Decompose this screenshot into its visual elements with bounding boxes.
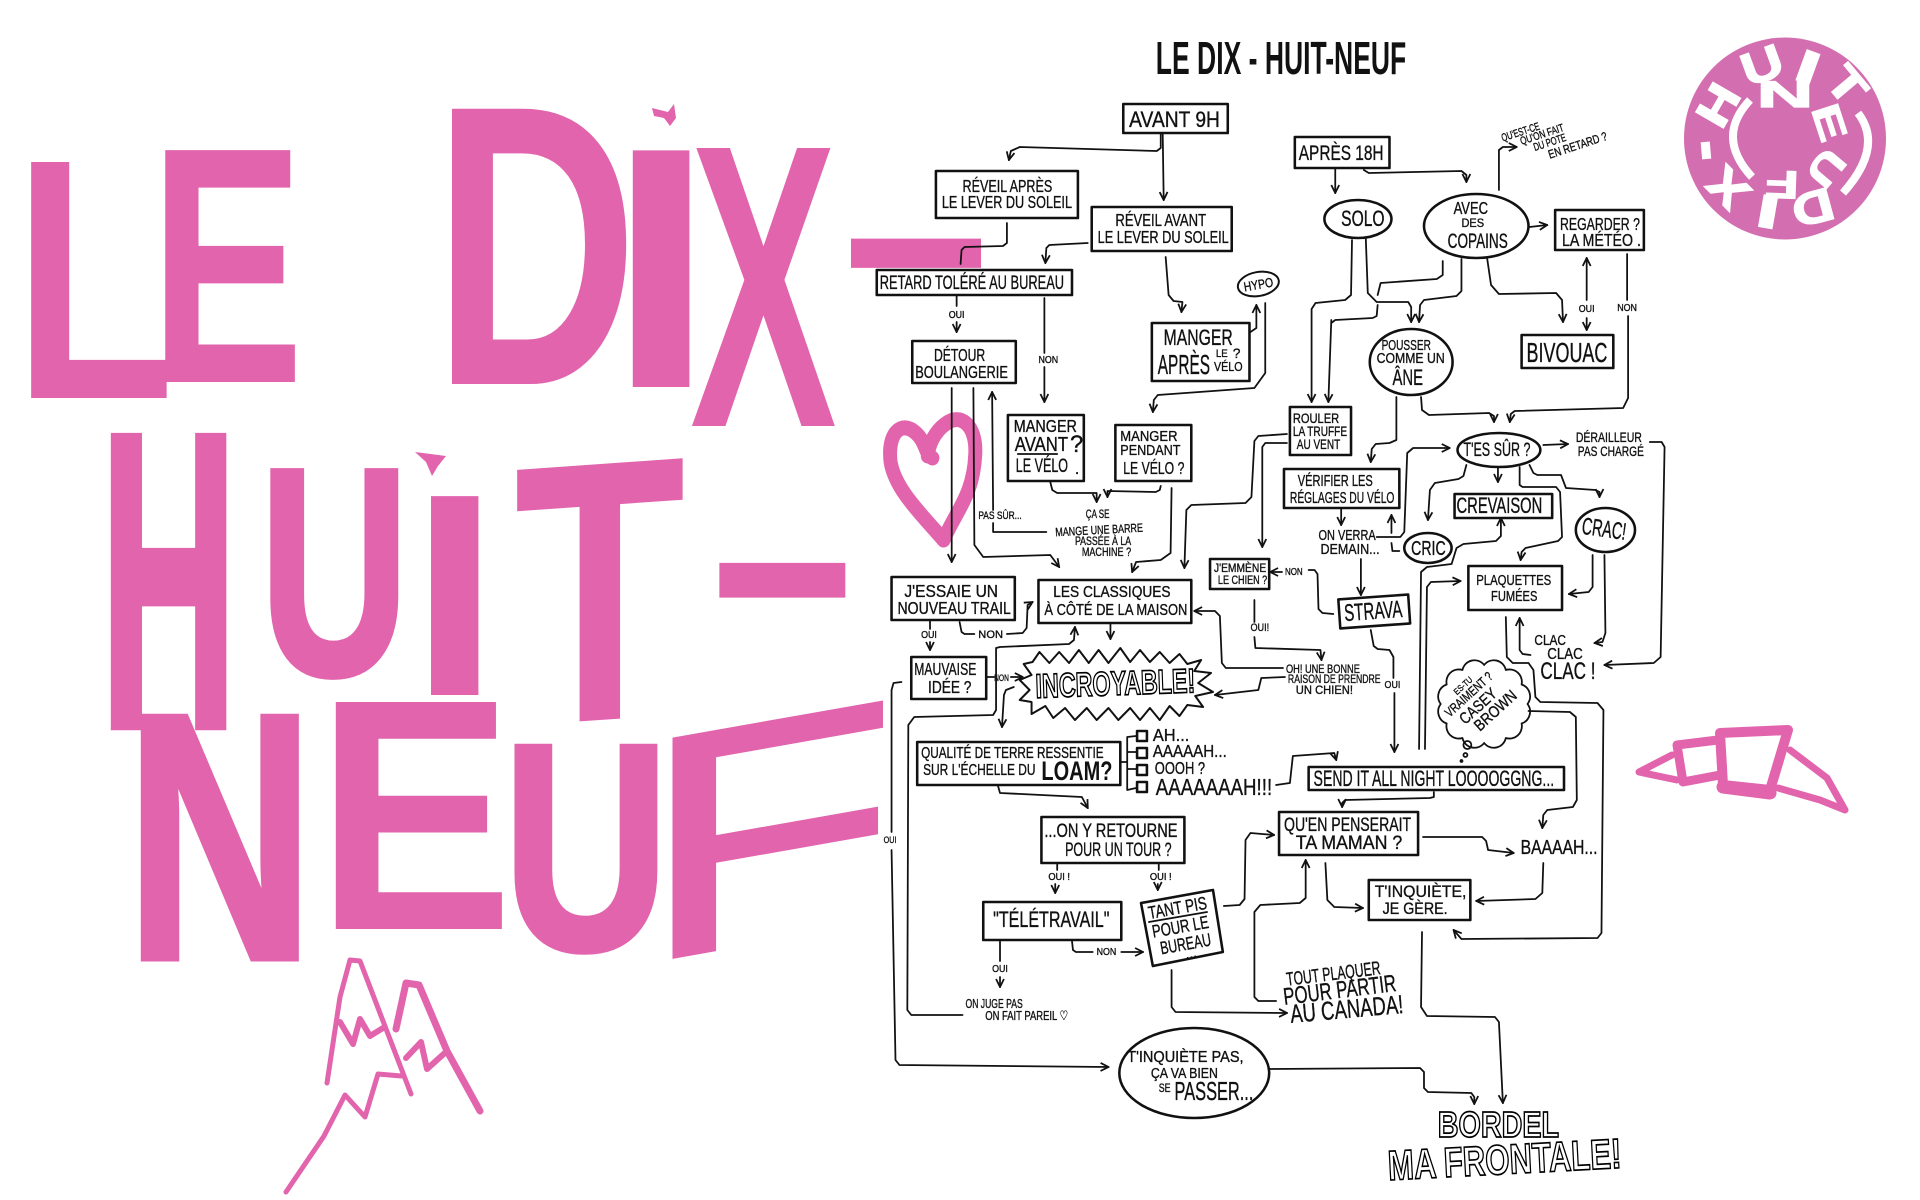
- note: on juge pas on fait pareil: [966, 996, 1068, 1023]
- arrows from pousser: [1371, 397, 1494, 462]
- arrow from bubble to frontale: [1268, 1068, 1474, 1104]
- bubble: cric: [1404, 533, 1452, 563]
- box: manger après le vélo: APRÈS: [1158, 349, 1210, 380]
- note: on juge pas on fait pareil: ON FAIT PAREIL ♡: [985, 1008, 1068, 1023]
- arrows from avant 9h: [1009, 133, 1164, 200]
- box: on y retourne pour un tour: ...ON Y RETOURNE: [1044, 820, 1177, 841]
- arrow from baaaah: [1476, 863, 1543, 901]
- box: manger avant le vélo: ?: [1070, 431, 1083, 458]
- arrows from strava: OUI: [1385, 680, 1400, 691]
- arrows from regarder la météo: NON: [1617, 303, 1637, 314]
- box: après 18h: [1295, 137, 1389, 168]
- thought cloud: es-tu vraiment casey brown: VRAIMENT ?: [1442, 669, 1496, 720]
- bubble: pousser comme un âne: ÂNE: [1392, 365, 1423, 390]
- box: crevaison: CREVAISON: [1457, 493, 1542, 518]
- box: détour boulangerie: DÉTOUR: [934, 345, 985, 365]
- big pink brush title: I: [606, 77, 716, 461]
- note: qu'est-ce qu'on fait du pote en retard: QU'ON FAIT: [1519, 122, 1566, 148]
- big pink brush title: -: [831, 95, 1002, 370]
- bubble: solo: [1324, 200, 1391, 238]
- box: mauvaise idée: [911, 657, 986, 699]
- box: qu'en penserait ta maman: [1279, 812, 1418, 855]
- big pink brush title: T: [514, 377, 686, 805]
- arrows from qu'en penserait: [1325, 837, 1514, 908]
- arrows from réveil avant: [1045, 243, 1182, 312]
- arrows from j'essaie: NON: [978, 629, 1003, 641]
- box: les classiques à côté de la maison: [1038, 580, 1191, 623]
- note: oh une bonne raison de prendre un chien: OH! UNE BONNE: [1286, 662, 1360, 676]
- arrow from t'inquiète to frontale: [1421, 932, 1503, 1103]
- final text: bordel ma frontale: [1387, 1105, 1622, 1189]
- final text: bordel ma frontale: BORDEL: [1438, 1105, 1559, 1145]
- logo badge: I: [1788, 39, 1827, 96]
- box: réveil après le lever du soleil: [936, 171, 1078, 218]
- label: baaaah: BAAAAH...: [1521, 837, 1598, 859]
- box: regarder la météo: LA MÉTÉO .: [1562, 230, 1641, 250]
- logo badge: H: [1686, 75, 1751, 136]
- arrow: classiques to incroyable: [1109, 624, 1111, 639]
- arrows from tant pis: [1172, 833, 1287, 1013]
- bubble: pousser comme un âne: [1370, 329, 1453, 395]
- box: qualité de terre loam: SUR L'ÉCHELLE DU: [923, 760, 1036, 779]
- box: rouler la truffe au vent: [1290, 407, 1351, 455]
- box: réveil avant le lever du soleil: RÉVEIL AVANT: [1115, 210, 1206, 230]
- big pink brush title: N: [126, 642, 314, 1033]
- box: tant pis pour le bureau: BUREAU: [1159, 930, 1213, 958]
- icon: pink heart: [890, 420, 975, 540]
- box: réveil après le lever du soleil: RÉVEIL APRÈS: [963, 176, 1052, 196]
- flowchart heading: LE DIX - HUIT-NEUF: [1156, 33, 1406, 84]
- box: qu'en penserait ta maman: TA MAMAN ?: [1296, 832, 1402, 853]
- big pink brush title: U: [260, 407, 409, 737]
- arrows from j'essaie: [921, 602, 1033, 650]
- bubble: hypo: [1236, 269, 1281, 299]
- bubble: t'inquiète pas ça va bien se passer: [1119, 1028, 1269, 1118]
- box: manger avant le vélo: [1008, 415, 1084, 481]
- big pink brush title: [14, 22, 1002, 1033]
- logo badge: N: [1757, 74, 1813, 115]
- arrows from on y retourne: OUI !: [1048, 872, 1070, 883]
- box: send it all night: [1309, 766, 1564, 791]
- checkbox options: AAAAAH...: [1153, 741, 1227, 761]
- box: manger après le vélo: LE: [1216, 348, 1228, 360]
- box: manger avant le vélo: AVANT: [1015, 434, 1068, 456]
- arrows from télétravail: OUI: [992, 964, 1008, 975]
- arrows: to loam and back to classiques: [907, 627, 1075, 1015]
- arrows and label from j'emmène le chien: [1250, 600, 1321, 660]
- bubble: t'inquiète pas ça va bien se passer: PASSER...: [1175, 1078, 1253, 1106]
- box: plaquettes fumées: [1468, 566, 1562, 610]
- box: tant pis pour le bureau: TANT PIS: [1147, 893, 1208, 923]
- box: vérifier les réglages du vélo: [1284, 469, 1399, 508]
- box: qualité de terre loam: [917, 742, 1120, 786]
- big pink brush title: I: [409, 434, 500, 757]
- box: t'inquiète je gère: T'INQUIÈTE,: [1375, 882, 1466, 901]
- arrows from retard with oui non labels: [949, 295, 1058, 402]
- arrows from retard with oui non labels: NON: [1038, 355, 1058, 366]
- text: tout plaquer pour partir au canada: [1282, 957, 1404, 1029]
- arrows from télétravail: [992, 941, 1143, 987]
- box: manger après le vélo: MANGER: [1164, 325, 1233, 350]
- bubble: avec des copains: AVEC: [1454, 198, 1488, 218]
- box: manger pendant le vélo: LE VÉLO ?: [1123, 458, 1184, 478]
- bubble: t'inquiète pas ça va bien se passer: T'INQUIÈTE PAS,: [1127, 1047, 1244, 1066]
- burst: incroyable: INCROYABLE!: [1035, 662, 1196, 706]
- box: réveil avant le lever du soleil: [1092, 207, 1232, 251]
- label: pas sûr: PAS SÛR...: [978, 509, 1022, 522]
- arrows from t'es sûr: [1428, 444, 1600, 560]
- thought cloud: es-tu vraiment casey brown: [1438, 660, 1530, 762]
- bubble: t'inquiète pas ça va bien se passer: SE: [1159, 1081, 1171, 1095]
- arrow from send it: [1342, 792, 1434, 807]
- box: détour boulangerie: [912, 341, 1016, 383]
- arrows around plaquettes: [1419, 518, 1603, 939]
- arrows from mauvaise idée: OUI: [884, 835, 896, 845]
- text: tout plaquer pour partir au canada: AU CANADA!: [1289, 991, 1404, 1029]
- text: clac clac clac: CLAC: [1534, 633, 1566, 649]
- box: plaquettes fumées: PLAQUETTES: [1476, 573, 1551, 589]
- bubble: solo: SOLO: [1341, 206, 1385, 231]
- box: manger après le vélo: VÉLO: [1214, 359, 1243, 374]
- bubble: avec des copains: DES: [1461, 216, 1484, 230]
- box: manger pendant le vélo: MANGER: [1120, 429, 1178, 445]
- box: télétravail: [983, 902, 1121, 940]
- thought cloud: es-tu vraiment casey brown: CASEY: [1456, 685, 1501, 728]
- note: on juge pas on fait pareil: ON JUGE PAS: [966, 996, 1023, 1011]
- note: oh une bonne raison de prendre un chien: RAISON DE PRENDRE: [1288, 672, 1381, 686]
- burst: incroyable: [1020, 648, 1213, 720]
- box: manger pendant le vélo: [1115, 425, 1191, 481]
- arrows and label from j'emmène le chien: OUI!: [1250, 622, 1269, 634]
- label: dérailleur pas chargé: PAS CHARGÉ: [1578, 443, 1644, 459]
- box: bivouac: [1522, 335, 1613, 368]
- note: qu'est-ce qu'on fait du pote en retard: [1500, 101, 1609, 174]
- arrows from mauvaise idée: NON: [994, 673, 1009, 683]
- bubble: pousser comme un âne: POUSSER: [1382, 338, 1431, 354]
- label: on verra demain: ON VERRA: [1318, 528, 1376, 544]
- box: qualité de terre loam: LOAM?: [1041, 756, 1112, 786]
- big pink brush title: L: [14, 88, 175, 471]
- text: tout plaquer pour partir au canada: POUR PARTIR: [1282, 970, 1398, 1011]
- logo badge: T: [1815, 56, 1877, 116]
- arrows from strava: NON: [1285, 567, 1303, 578]
- bubble: t'es sûr: [1458, 433, 1540, 467]
- box: j'emmène le chien: [1210, 559, 1269, 589]
- thought cloud: es-tu vraiment casey brown: ES-TU: [1452, 675, 1474, 697]
- box: rouler la truffe au vent: LA TRUFFE: [1293, 423, 1347, 439]
- box: j'essaie un nouveau trail: J'ESSAIE UN: [904, 581, 998, 601]
- bubble: crac: CRAC!: [1580, 513, 1628, 546]
- checkbox options: OOOH ?: [1155, 758, 1205, 778]
- box: avant 9h: AVANT 9H: [1129, 107, 1220, 132]
- arrows from rouler la truffe: [1184, 434, 1287, 568]
- arrows from après 18h: [1335, 168, 1466, 193]
- box: vérifier les réglages du vélo: RÉGLAGES DU VÉLO: [1290, 488, 1394, 507]
- box: après 18h: APRÈS 18H: [1299, 142, 1384, 165]
- box: rouler la truffe au vent: AU VENT: [1297, 436, 1341, 452]
- label: on verra demain: DEMAIN...: [1320, 542, 1380, 558]
- box: j'essaie un nouveau trail: [892, 577, 1015, 620]
- logo badge: U: [1798, 140, 1855, 196]
- box: tant pis pour le bureau: [1141, 890, 1223, 966]
- text: clac clac clac: CLAC !: [1540, 658, 1596, 685]
- bubble: pousser comme un âne: COMME UN: [1377, 351, 1445, 367]
- box: manger pendant le vélo: PENDANT: [1120, 443, 1180, 459]
- arrow from dérailleur: [1604, 442, 1665, 665]
- box: tant pis pour le bureau: POUR LE: [1151, 912, 1210, 942]
- arrow from cloud to baaaah: [1529, 711, 1577, 828]
- box: réveil avant le lever du soleil: LE LEVER DU SOLEIL: [1098, 227, 1229, 247]
- note: ça se mange une barre passée à la machine: [1055, 507, 1143, 559]
- box: strava: [1338, 595, 1410, 628]
- arrows from loam: [998, 753, 1336, 808]
- big pink brush title: F: [640, 631, 898, 1030]
- logo badge: F: [1764, 162, 1800, 206]
- box: vérifier les réglages du vélo: VÉRIFIER LES: [1298, 471, 1373, 490]
- note: qu'est-ce qu'on fait du pote en retard: QU'EST-CE: [1500, 121, 1541, 145]
- note: ça se mange une barre passée à la machine: MANGE UNE BARRE: [1055, 521, 1143, 539]
- logo badge: D: [1786, 177, 1839, 237]
- big pink brush title: E: [316, 631, 513, 1000]
- arrows around manger après: [1153, 303, 1265, 412]
- arrows from mauvaise idée: [884, 673, 1108, 1067]
- big pink brush title: D: [433, 22, 638, 469]
- big pink brush title: E: [150, 78, 304, 454]
- box: qu'en penserait ta maman: QU'EN PENSERAIT: [1284, 814, 1412, 835]
- box: bivouac: BIVOUAC: [1527, 337, 1607, 368]
- logo badge: X: [1697, 155, 1760, 219]
- bubble: hypo: HYPO: [1243, 274, 1274, 295]
- arrows from on y retourne: [1048, 864, 1172, 893]
- box: j'essaie un nouveau trail: NOUVEAU TRAIL: [897, 598, 1011, 618]
- panel: flowchart: [877, 33, 1665, 1189]
- box: télétravail: "TÉLÉTRAVAIL": [993, 907, 1109, 932]
- arrows from télétravail: NON: [1097, 947, 1116, 958]
- logo badge: I: [1752, 184, 1784, 239]
- box: t'inquiète je gère: [1369, 880, 1470, 920]
- arrows from manger avant and pendant: [1050, 482, 1172, 572]
- text: clac clac clac: CLAC: [1547, 646, 1583, 663]
- bubble: avec des copains: COPAINS: [1448, 230, 1508, 253]
- box: on y retourne pour un tour: POUR UN TOUR ?: [1065, 839, 1172, 860]
- note: oh une bonne raison de prendre un chien: UN CHIEN!: [1296, 683, 1353, 697]
- bubble: cric: CRIC: [1411, 538, 1446, 560]
- checkbox options: [1120, 725, 1272, 800]
- arrows around on verra demain: [1341, 448, 1450, 595]
- logo badge: -: [1667, 138, 1735, 164]
- box: manger après le vélo: [1152, 323, 1249, 381]
- box: j'emmène le chien: LE CHIEN ?: [1218, 573, 1267, 587]
- label: dérailleur pas chargé: [1576, 429, 1644, 459]
- box: manger avant le vélo: .: [1075, 461, 1079, 478]
- box: mauvaise idée: IDÉE ?: [928, 677, 971, 697]
- arrow: réveil après to retard: [961, 223, 1007, 264]
- label: dérailleur pas chargé: DÉRAILLEUR: [1576, 429, 1642, 445]
- box: manger après le vélo: ?: [1233, 345, 1241, 361]
- arrows from regarder la météo: [1510, 254, 1637, 422]
- arrows from solo: [1312, 239, 1411, 402]
- box: réveil après le lever du soleil: LE LEVER DU SOLEIL: [942, 192, 1072, 212]
- label: on verra demain: [1318, 528, 1380, 558]
- arrows from avec des copains: [1328, 147, 1563, 402]
- icon: pink croissant: [1639, 730, 1845, 810]
- note: ça se mange une barre passée à la machine: ÇA SE: [1086, 507, 1109, 521]
- logo badge: [1667, 35, 1886, 240]
- box: les classiques à côté de la maison: À CÔTÉ DE LA MAISON: [1044, 600, 1187, 619]
- arrow from tout plaquer: [1254, 860, 1306, 1001]
- box: t'inquiète je gère: JE GÈRE.: [1383, 899, 1448, 918]
- note: qu'est-ce qu'on fait du pote en retard: DU POTE: [1532, 132, 1568, 154]
- box: retard toléré au bureau: [877, 270, 1072, 295]
- box: détour boulangerie: BOULANGERIE: [915, 362, 1008, 382]
- box: rouler la truffe au vent: ROULER: [1293, 410, 1339, 426]
- box: tant pis pour le bureau: ...: [1184, 944, 1198, 962]
- bubble: avec des copains: [1424, 194, 1529, 258]
- text: clac clac clac: [1534, 633, 1596, 685]
- box: send it all night: SEND IT ALL NIGHT LOOOOGGNG...: [1314, 766, 1554, 791]
- box: strava: STRAVA: [1343, 596, 1403, 627]
- thought cloud: es-tu vraiment casey brown: BROWN: [1471, 687, 1521, 735]
- arrows from crac: [1569, 555, 1605, 643]
- final text: bordel ma frontale: MA FRONTALE!: [1387, 1130, 1622, 1189]
- arrows from regarder la météo: OUI: [1579, 304, 1595, 315]
- box: retard toléré au bureau: RETARD TOLÉRÉ AU BUREAU: [880, 272, 1064, 293]
- note: qu'est-ce qu'on fait du pote en retard: EN RETARD ?: [1546, 129, 1609, 162]
- big pink brush title: H: [100, 347, 237, 816]
- checkbox options: AAAAAAAH!!!: [1156, 774, 1272, 800]
- arrows from on y retourne: OUI !: [1150, 872, 1172, 883]
- icon: pink mountain: [286, 960, 480, 1192]
- box: regarder la météo: [1555, 210, 1644, 250]
- box: on y retourne pour un tour: [1041, 817, 1184, 863]
- bubble: t'inquiète pas ça va bien se passer: ÇA VA BIEN: [1151, 1066, 1218, 1082]
- big pink brush title: -: [700, 393, 865, 718]
- bubble: crac: [1576, 508, 1635, 552]
- box: mauvaise idée: MAUVAISE: [914, 659, 976, 679]
- logo badge: E: [1802, 99, 1855, 147]
- arrows from oh une bonne raison: [1194, 611, 1285, 695]
- big pink brush title: U: [503, 683, 669, 1011]
- bubble: t'es sûr: T'ES SÛR ?: [1463, 439, 1530, 460]
- arrows from retard with oui non labels: OUI: [949, 310, 965, 321]
- box: qualité de terre loam: QUALITÉ DE TERRE RESSENTIE: [921, 743, 1104, 762]
- note: ça se mange une barre passée à la machine: MACHINE ?: [1082, 545, 1131, 559]
- box: manger avant le vélo: MANGER: [1014, 416, 1077, 436]
- note: oh une bonne raison de prendre un chien: [1286, 662, 1381, 697]
- box: manger avant le vélo: LE VÉLO: [1016, 455, 1068, 476]
- box: plaquettes fumées: FUMÉES: [1491, 588, 1537, 605]
- box: regarder la météo: REGARDER ?: [1560, 214, 1640, 234]
- text: tout plaquer pour partir au canada: TOUT PLAQUER: [1285, 957, 1382, 990]
- note: ça se mange une barre passée à la machine: PASSÉE À LA: [1075, 533, 1131, 548]
- arrows from strava: [1270, 567, 1400, 752]
- arrows around détour boulangerie: [952, 388, 1059, 567]
- arrows from j'essaie: OUI: [921, 630, 937, 641]
- box: les classiques à côté de la maison: LES CLASSIQUES: [1053, 584, 1171, 601]
- box: j'emmène le chien: J'EMMÈNE: [1214, 560, 1266, 575]
- big pink brush title: X: [690, 61, 838, 512]
- logo badge: U: [1734, 35, 1791, 97]
- checkbox options: AH...: [1153, 725, 1189, 745]
